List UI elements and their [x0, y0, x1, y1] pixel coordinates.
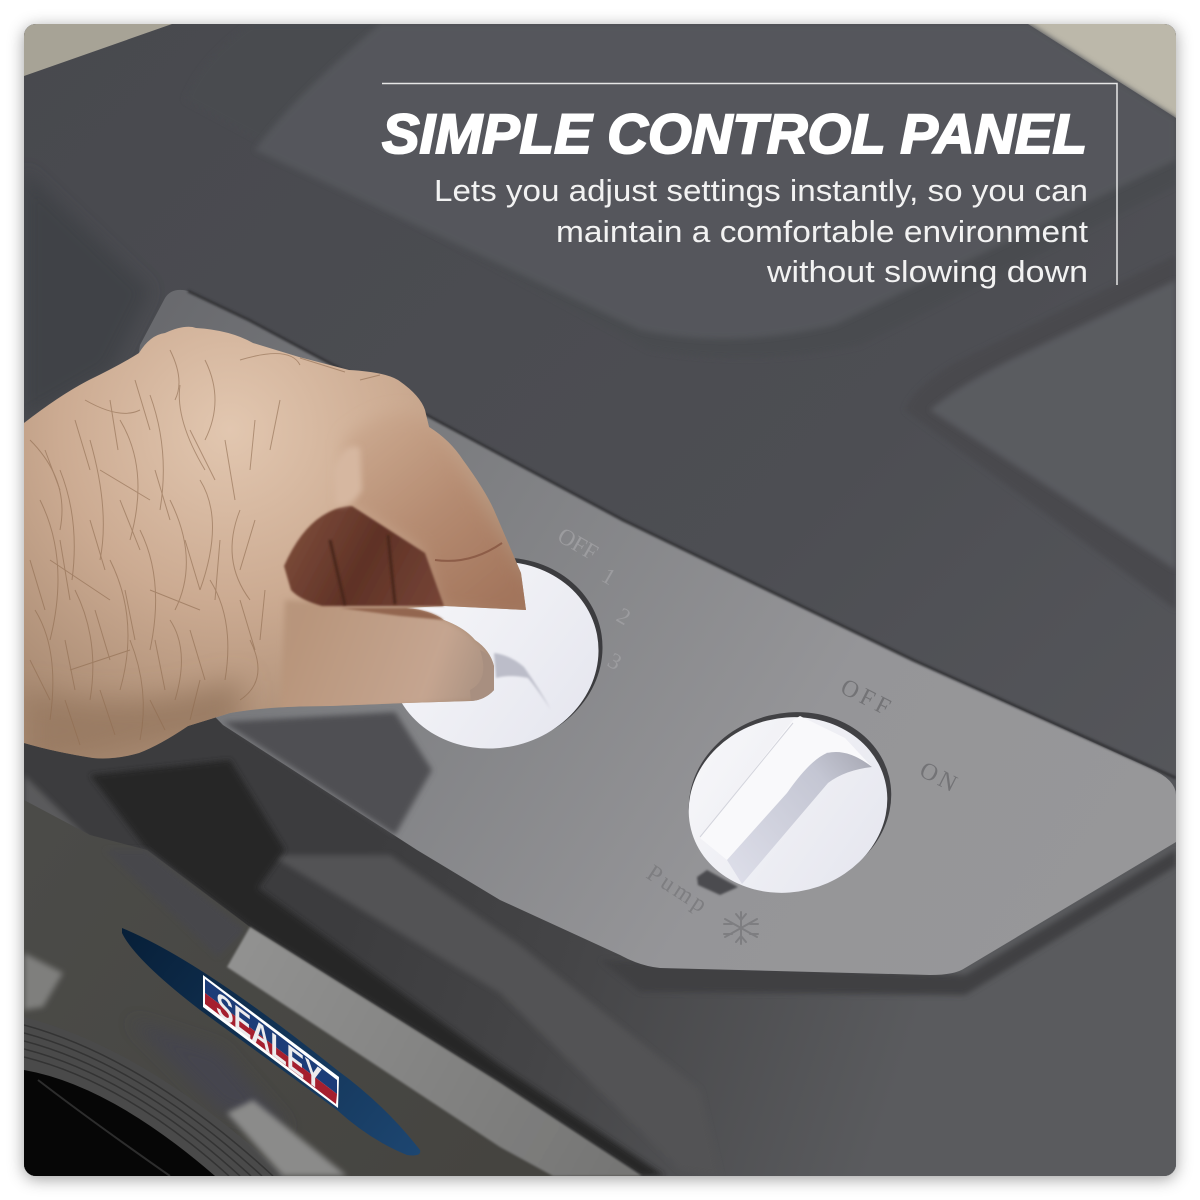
dial 2 grip side [727, 752, 872, 884]
title: SIMPLE CONTROL PANEL [382, 102, 1087, 165]
thumb shadow top [340, 608, 444, 620]
finger joint crease [435, 543, 502, 561]
light patch on front left [24, 953, 63, 1010]
embossed dial 2 labels: Pump [642, 860, 711, 918]
vent grille [24, 1017, 285, 1176]
panel top edge line [188, 291, 1176, 778]
description: without slowing down [766, 254, 1088, 289]
hand shadow on panel [223, 712, 432, 835]
embossed dial 1 labels: OFF [554, 523, 602, 565]
black shadow under lid [90, 760, 665, 1176]
description [434, 173, 1088, 289]
gap creases [330, 535, 395, 605]
description: Lets you adjust settings instantly, so you can [434, 173, 1088, 208]
embossed dial 2 labels: OFF [836, 674, 894, 721]
dial 1 [402, 558, 602, 748]
front face [24, 801, 550, 1176]
bluish reflection on front [146, 849, 168, 865]
dial 1 handle shadow [493, 652, 547, 704]
blue oval badge [122, 928, 420, 1155]
embossed dial 1 labels: 2 [612, 603, 635, 630]
embossed dial 1 labels: 1 [598, 563, 620, 590]
bright stripe on front [227, 927, 642, 1176]
finger gap [284, 506, 444, 606]
lid recess right [930, 264, 1175, 604]
lower edge shade [24, 680, 240, 770]
thumb nail [470, 650, 494, 701]
embossed dial 1 labels [559, 530, 630, 669]
thumb [280, 600, 494, 715]
light patch at bottom [227, 1100, 347, 1176]
frame lines [382, 84, 1117, 285]
hand shading, clipped to the hand [24, 412, 540, 770]
ground background corners [24, 24, 1176, 118]
dial 2 pointer shadow [697, 870, 738, 895]
icon: snowflake [724, 912, 758, 944]
index finger [345, 412, 540, 620]
title block [382, 84, 1117, 289]
lid recess top [259, 24, 1176, 336]
lower lid [24, 715, 1176, 1176]
dial 2 grip top [700, 716, 872, 860]
embossed dial 2 labels [642, 674, 961, 918]
SEALEY logo: SEALEY [216, 983, 322, 1100]
lid shade below panel [600, 850, 1176, 995]
bluish reflection lower [173, 1046, 252, 1106]
hair strokes [30, 350, 380, 745]
embossed dial 2 labels: ON [915, 757, 961, 798]
control panel [100, 290, 1176, 975]
dial 2 [688, 712, 892, 896]
embossed dial 1 labels: 3 [604, 648, 626, 675]
hand [24, 327, 540, 770]
lighter strip at left edge [24, 777, 83, 831]
dial 2 grip seam [700, 723, 793, 837]
left lid shading [28, 192, 140, 406]
hand shape [24, 327, 526, 758]
textured band [279, 854, 660, 1124]
description: maintain a comfortable environment [556, 214, 1088, 249]
knuckle fold highlight [333, 446, 362, 506]
